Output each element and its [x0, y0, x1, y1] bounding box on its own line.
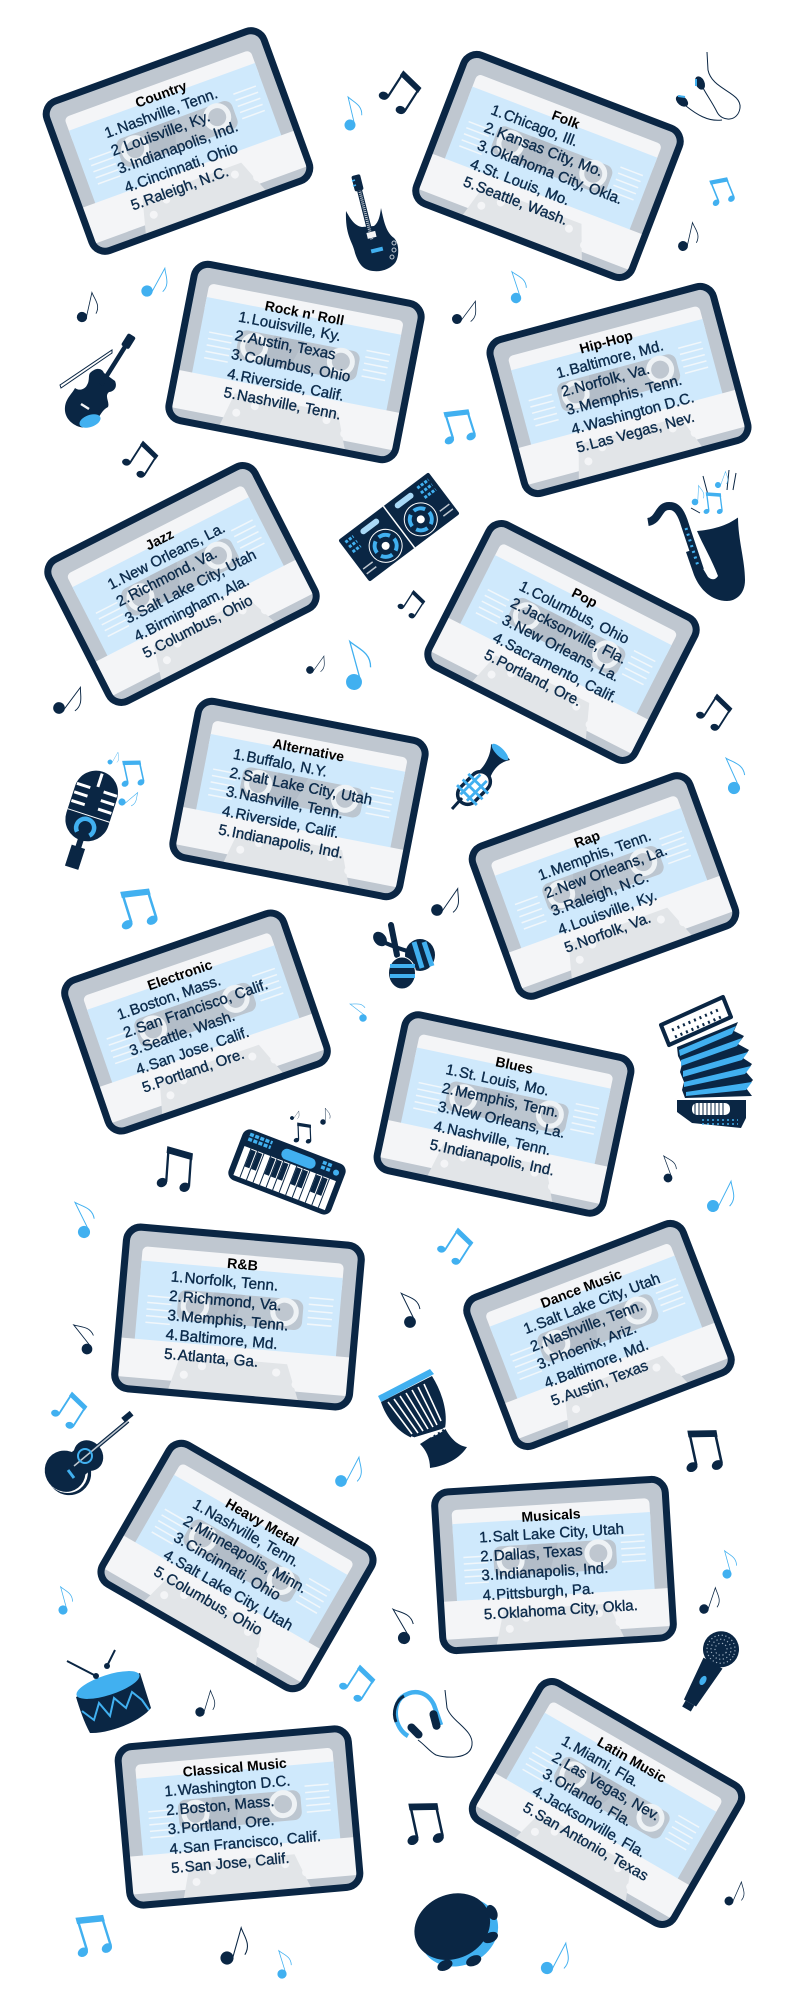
panel: Blues cassette [370, 1011, 638, 1217]
icon: beamed notes [400, 1798, 446, 1850]
list: Blues cities: 3.New Orleans, La. [436, 1098, 566, 1142]
list: Musicals cities [479, 1520, 638, 1623]
list: Blues cities: 2.Memphis, Tenn. [440, 1080, 560, 1121]
list: Folk cities: 3.Oklahoma City, Okla. [475, 137, 625, 208]
list: Hip-Hop cities: 2.Norfolk, Va. [559, 361, 652, 401]
heading: Musicals: Musicals [521, 1505, 581, 1525]
icon: trumpet [451, 741, 511, 811]
icon: beamed notes [679, 1425, 725, 1477]
list: Jazz cities: 2.Richmond, Va. [114, 545, 220, 610]
list: Pop cities: 4.Sacramento, Calif. [490, 629, 620, 707]
list: R&B cities: 5.Atlanta, Ga. [163, 1346, 259, 1371]
icon: music note [51, 682, 89, 722]
icon: headphones [394, 1690, 472, 1757]
list: Dance Music cities: 4.Baltimore, Md. [542, 1337, 651, 1392]
list: Electronic cities: 5.Portland, Ore. [140, 1046, 247, 1096]
list: Rap cities: 5.Norfolk, Va. [562, 910, 653, 957]
list: Blues cities [428, 1061, 574, 1180]
icon: music note [219, 1925, 254, 1970]
list: Heavy Metal cities: 2.Minneapolis, Minn. [180, 1513, 310, 1597]
panel: Latin Music cassette [463, 1674, 751, 1932]
icon: DJ deck [338, 472, 460, 582]
icon: djembe drum [378, 1369, 467, 1468]
icon: beamed notes [436, 405, 478, 448]
list: Hip-Hop cities: 5.Las Vegas, Nev. [574, 409, 696, 457]
icon: music note [347, 998, 372, 1023]
icon: music note [139, 264, 174, 303]
list: Dance Music cities: 5.Austin, Texas [549, 1357, 651, 1410]
list: Country cities: 5.Raleigh, N.C. [129, 163, 231, 214]
heading: Heavy Metal: Heavy Metal [223, 1495, 302, 1550]
icon: music note [341, 95, 364, 131]
heading: Folk: Folk [550, 107, 582, 132]
heading: Dance Music: Dance Music [538, 1265, 624, 1311]
list: Dance Music cities [521, 1270, 690, 1410]
panel: Musicals cassette [429, 1478, 679, 1652]
list: Jazz cities: 1.New Orleans, La. [105, 520, 228, 593]
list: Rock cities [222, 309, 359, 424]
list: Rap cities: 1.Memphis, Tenn. [536, 828, 654, 884]
list: Pop cities: 1.Columbus, Ohio [516, 578, 632, 648]
list: Musicals cities: 2.Dallas, Texas [480, 1542, 583, 1565]
heading: Hip-Hop: Hip-Hop [578, 327, 634, 356]
list: Alternative cities: 4.Riverside, Calif. [221, 803, 340, 842]
icon: music note [718, 754, 750, 796]
heading: Latin Music: Latin Music [595, 1734, 670, 1786]
list: Musicals cities: 3.Indianapolis, Ind. [481, 1560, 609, 1584]
icon: music note [505, 269, 529, 304]
icon: beamed notes [395, 587, 428, 621]
list: Folk cities: 2.Kansas City, Mo. [482, 119, 605, 180]
list: Country cities: 4.Cincinnati, Ohio [122, 140, 240, 196]
panel: Country cassette [38, 25, 318, 257]
list: Latin Music cities: 2.Las Vegas, Nev. [549, 1749, 663, 1824]
list: Latin Music cities: 1.Miami, Fla. [558, 1732, 642, 1791]
panel: Jazz cassette [39, 459, 325, 710]
list: Heavy Metal cities: 1.Nashville, Tenn. [190, 1496, 302, 1571]
list: Rap cities: 4.Louisville, Ky. [556, 887, 659, 939]
list: Country cities [102, 83, 254, 214]
icon: electric guitar [346, 174, 398, 271]
list: Rap cities: 2.New Orleans, La. [542, 842, 670, 902]
panel: Folk cassette [407, 49, 689, 284]
panel: Rock n' Roll cassette [162, 261, 428, 463]
list: Classical Music cities [164, 1770, 323, 1877]
panel: Classical Music cassette [113, 1727, 366, 1907]
list: Folk cities [461, 102, 638, 245]
list: Folk cities: 1.Chicago, Ill. [488, 102, 580, 150]
heading: Rap: Rap [572, 827, 602, 851]
list: Blues cities: 5.Indianapolis, Ind. [428, 1136, 556, 1179]
list: Country cities: 2.Louisville, Ky. [109, 108, 212, 160]
list: Hip-Hop cities: 3.Memphis, Tenn. [564, 372, 684, 419]
icon: violin [60, 333, 136, 430]
icon: music note [386, 1604, 420, 1646]
icon: music note [429, 884, 467, 924]
list: Musicals cities: 1.Salt Lake City, Utah [479, 1521, 624, 1546]
list: Blues cities: 4.Nashville, Tenn. [432, 1118, 552, 1159]
list: Latin Music cities: 4.Jacksonville, Fla. [529, 1783, 648, 1861]
icon: music note [68, 1319, 101, 1356]
list: Alternative cities: 1.Buffalo, N.Y. [232, 746, 329, 781]
panel: Dance Music cassette [458, 1218, 740, 1453]
icon: music note [677, 221, 702, 254]
icon: beamed notes [704, 174, 737, 209]
icon: beamed notes [118, 437, 161, 481]
heading: Pop: Pop [569, 584, 600, 611]
heading: Alternative: Alternative [271, 735, 346, 765]
list: Latin Music cities: 3.Orlando, Fla. [539, 1765, 635, 1830]
list: Pop cities: 2.Jacksonville, Fla. [508, 595, 629, 668]
list: R&B cities: 1.Norfolk, Tenn. [170, 1268, 279, 1295]
list: Electronic cities: 1.Boston, Mass. [115, 972, 223, 1024]
icon: beamed notes [155, 1145, 195, 1194]
icon: music note [75, 290, 102, 326]
list: Rap cities: 3.Raleigh, N.C. [549, 869, 651, 920]
list: Electronic cities: 3.Seattle, Wash. [127, 1008, 237, 1060]
icon: music note [67, 1198, 100, 1240]
panel: Hip-Hop cassette [483, 282, 756, 498]
list: Heavy Metal cities [151, 1496, 325, 1651]
list: Alternative cities: 5.Indianapolis, Ind. [217, 821, 345, 862]
list: Hip-Hop cities: 1.Baltimore, Md. [555, 337, 665, 382]
heading: Classical Music: Classical Music [182, 1755, 287, 1780]
icon: music note [194, 1688, 219, 1721]
icon: keyboard [226, 1127, 348, 1217]
list: Jazz cities: 3.Salt Lake City, Utah [122, 546, 259, 627]
icon: music note [54, 1585, 75, 1615]
list: Electronic cities [115, 958, 289, 1096]
list: Classical Music cities: 1.Washington D.C. [164, 1772, 291, 1800]
list: Jazz cities: 4.Birmingham, Ala. [131, 572, 252, 645]
heading: Country: Country [133, 77, 189, 111]
list: Classical Music cities: 2.Boston, Mass. [165, 1793, 275, 1819]
icon: music note [698, 1585, 724, 1618]
list: Alternative cities: 3.Nashville, Tenn. [224, 783, 345, 823]
icon: beamed notes [335, 1661, 378, 1705]
list: Folk cities: 5.Seattle, Wash. [461, 173, 570, 229]
list: Musicals cities: 4.Pittsburgh, Pa. [482, 1581, 595, 1604]
list: Dance Music cities: 3.Phoenix, Ariz. [535, 1320, 639, 1373]
list: Pop cities [481, 578, 646, 724]
icon: music note [718, 1549, 739, 1579]
icon: music note [705, 1177, 741, 1219]
heading: Electronic: Electronic [145, 956, 215, 993]
list: Country cities: 3.Indianapolis, Ind. [115, 118, 240, 178]
panel: Electronic cassette [57, 908, 336, 1137]
list: R&B cities [163, 1268, 293, 1373]
icon: saxophone [648, 470, 745, 601]
icon: tambourine [403, 1878, 514, 1984]
panel: Rap cassette [464, 770, 744, 1002]
icon: beamed notes [374, 66, 425, 118]
list: Country cities: 1.Nashville, Tenn. [102, 85, 220, 142]
list: Classical Music cities: 5.San Jose, Calif. [170, 1850, 290, 1877]
icon: hand microphone [671, 1625, 746, 1718]
list: Classical Music cities: 3.Portland, Ore. [167, 1812, 275, 1838]
list: Hip-Hop cities [555, 333, 701, 457]
icon: music note [723, 1879, 749, 1910]
list: Jazz cities [105, 513, 277, 662]
list: Rock cities: 4.Riverside, Calif. [226, 365, 345, 405]
list: R&B cities: 4.Baltimore, Md. [165, 1326, 278, 1353]
list: Rap cities [536, 824, 690, 957]
list: Rock cities: 1.Louisville, Ky. [237, 309, 342, 345]
icon: beamed notes [47, 1388, 90, 1432]
icon: notes above keyboard [289, 1108, 331, 1144]
icon: earbuds [674, 52, 740, 120]
list: Latin Music cities: 5.San Antonio, Texas [520, 1799, 651, 1885]
list: Classical Music cities: 4.San Francisco, Calif. [169, 1828, 322, 1858]
heading: R&B: R&B [226, 1256, 259, 1275]
list: R&B cities: 3.Memphis, Tenn. [167, 1307, 289, 1335]
icon: maracas [370, 925, 435, 989]
heading: Jazz: Jazz [142, 526, 176, 553]
panel: R&B cassette [109, 1226, 367, 1409]
icon: music note [658, 1154, 679, 1183]
list: Dance Music cities: 2.Nashville, Tenn. [528, 1297, 645, 1356]
icon: retro microphone [51, 765, 124, 875]
icon: music note [333, 1453, 369, 1494]
icon: beamed notes [433, 1224, 476, 1268]
icon: music note [339, 639, 374, 691]
list: Pop cities: 5.Portland, Ore. [481, 646, 584, 710]
panel: Pop cassette [419, 517, 705, 768]
icon: acoustic guitar [36, 1411, 134, 1504]
icon: notes by microphone [107, 750, 146, 811]
list: Alternative cities: 2.Salt Lake City, Utah [228, 764, 374, 809]
list: Alternative cities [217, 746, 377, 866]
list: Dance Music cities: 1.Salt Lake City, Utah [521, 1270, 663, 1338]
list: Pop cities: 3.New Orleans, La. [499, 612, 622, 686]
icon: beamed notes [112, 884, 160, 934]
panel: Heavy Metal cassette [92, 1436, 382, 1697]
icon: accordion [661, 997, 753, 1128]
icon: snare drum [67, 1650, 151, 1733]
list: Heavy Metal cities: 4.Salt Lake City, Utah [160, 1547, 296, 1635]
list: Heavy Metal cities: 5.Columbus, Ohio [151, 1563, 265, 1639]
list: Folk cities: 4.St. Louis, Mo. [468, 156, 572, 209]
heading: Rock n' Roll: Rock n' Roll [264, 297, 346, 328]
list: Rock cities: 2.Austin, Texas [233, 327, 337, 363]
icon: music note [273, 1949, 294, 1979]
icon: beamed notes [67, 1910, 115, 1962]
list: Rock cities: 3.Columbus, Ohio [230, 346, 352, 386]
icon: beamed notes [692, 690, 735, 734]
list: Electronic cities: 4.San Jose, Calif. [134, 1024, 251, 1079]
panel: Alternative cassette [166, 698, 432, 900]
list: Latin Music cities [520, 1732, 690, 1885]
list: Hip-Hop cities: 4.Washington D.C. [570, 389, 696, 438]
icon: music note [539, 1939, 576, 1981]
list: Electronic cities: 2.San Francisco, Calif. [121, 976, 270, 1042]
icon: music note [450, 297, 483, 331]
icon: music note [394, 1289, 425, 1330]
list: Heavy Metal cities: 3.Cincinnati, Ohio [170, 1529, 283, 1604]
list: Rock cities: 5.Nashville, Tenn. [222, 384, 342, 424]
icon: music note [305, 653, 330, 679]
list: Jazz cities: 5.Columbus, Ohio [140, 592, 256, 662]
list: Musicals cities: 5.Oklahoma City, Okla. [483, 1597, 638, 1623]
heading: Blues: Blues [494, 1053, 535, 1077]
list: R&B cities: 2.Richmond, Va. [168, 1288, 282, 1315]
list: Blues cities: 1.St. Louis, Mo. [444, 1061, 551, 1100]
